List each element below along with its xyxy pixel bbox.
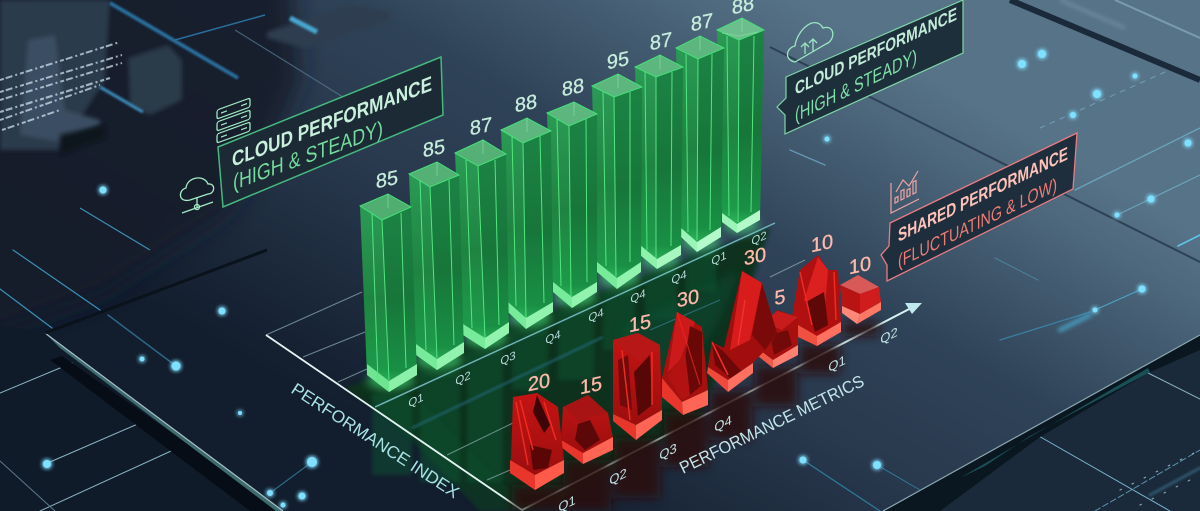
- red bar 5: [707, 271, 777, 392]
- quarter labels front row: [558, 324, 898, 511]
- red value labels: 30: [677, 286, 699, 312]
- red value labels: 15: [580, 373, 602, 399]
- quarter labels back row: [408, 228, 767, 410]
- red bar 2: [561, 395, 613, 464]
- quarter labels back row: Q4: [671, 267, 687, 287]
- red value labels: 10: [811, 231, 833, 257]
- red bar 8: [840, 275, 881, 324]
- green value labels: 85: [423, 136, 445, 162]
- top-right structures: [770, 0, 1200, 262]
- icon: cloud upload: [787, 23, 833, 62]
- quarter labels back row: Q2: [751, 228, 767, 248]
- bar 4: [501, 118, 553, 329]
- callout: shared performance: SHARED PERFORMANCE: [898, 143, 1068, 247]
- green value labels: 87: [470, 114, 492, 140]
- bar 7: [635, 55, 683, 269]
- bar 9: [717, 18, 764, 233]
- callout: cloud performance left: CLOUD PERFORMANCE: [232, 71, 432, 172]
- red bars: [510, 255, 881, 490]
- floor outside plate left: [0, 325, 283, 511]
- icon: bar chart trend: [891, 171, 919, 213]
- green value labels: 95: [607, 48, 629, 74]
- callout: cloud performance left: (HIGH & STEADY): [233, 115, 383, 195]
- quarter labels front row: Q2: [880, 324, 898, 347]
- callout: cloud performance right: [777, 0, 963, 134]
- red value labels: 10: [849, 253, 871, 279]
- bar 1: [360, 194, 417, 392]
- quarter labels back row: Q4: [630, 286, 646, 306]
- red value labels: 30: [744, 244, 766, 270]
- axes: [266, 223, 922, 510]
- quarter labels back row: Q1: [408, 390, 424, 410]
- quarter labels back row: Q4: [545, 327, 561, 347]
- background circuit lines outside plate: [0, 250, 1200, 511]
- quarter labels front row: Q3: [659, 440, 677, 463]
- plate edge shadows: [45, 250, 1200, 511]
- icon: server stack: [217, 98, 250, 143]
- bar 5: [547, 102, 597, 308]
- quarter labels front row: Q1: [828, 352, 846, 375]
- icon: cloud network: [180, 178, 214, 213]
- callout: cloud performance left: [218, 57, 443, 207]
- green value labels: 87: [691, 10, 713, 36]
- green base glow: [367, 217, 759, 390]
- quarter labels back row: Q3: [500, 348, 516, 368]
- glowing circuit lines on plate: [108, 72, 1200, 511]
- quarter labels back row: Q4: [588, 305, 604, 325]
- y axis title: PERFORMANCE INDEX: [288, 379, 463, 502]
- green value labels: 88: [515, 91, 537, 117]
- callout: shared performance: (FLUCTUATING & LOW): [898, 174, 1057, 273]
- chart floor reflection: [345, 228, 770, 511]
- red bar 4: [662, 312, 708, 415]
- red bar 1: [510, 393, 564, 490]
- top-left city: [0, 0, 390, 250]
- green value labels: 88: [562, 75, 584, 101]
- quarter labels back row: Q1: [711, 248, 727, 268]
- callout: shared performance: [881, 133, 1077, 281]
- red value labels: 20: [528, 370, 550, 396]
- red value labels: [528, 231, 871, 399]
- green value labels: 87: [650, 29, 672, 55]
- red bar 3: [613, 333, 662, 440]
- quarter labels front row: Q2: [609, 465, 627, 488]
- green value labels: 85: [376, 167, 398, 193]
- green bars: [360, 18, 764, 392]
- bar 6: [592, 74, 642, 289]
- bar 2: [409, 162, 464, 370]
- floor outside plate right: [883, 335, 1200, 511]
- green value labels: [376, 0, 754, 193]
- top-left dark region: [0, 0, 300, 340]
- quarter labels back row: Q2: [455, 368, 471, 388]
- x axis title: PERFORMANCE METRICS: [676, 372, 867, 478]
- bar 3: [455, 140, 509, 349]
- red bar reflections: [512, 322, 879, 511]
- callout: cloud performance right: (HIGH & STEADY): [795, 45, 917, 127]
- bar 8: [676, 36, 724, 252]
- red bar 6: [753, 310, 798, 368]
- red value labels: 5: [774, 286, 786, 310]
- quarter labels front row: Q4: [714, 412, 732, 435]
- red bar 7: [792, 255, 841, 346]
- red value labels: 15: [629, 311, 651, 337]
- grid lines: [266, 260, 805, 480]
